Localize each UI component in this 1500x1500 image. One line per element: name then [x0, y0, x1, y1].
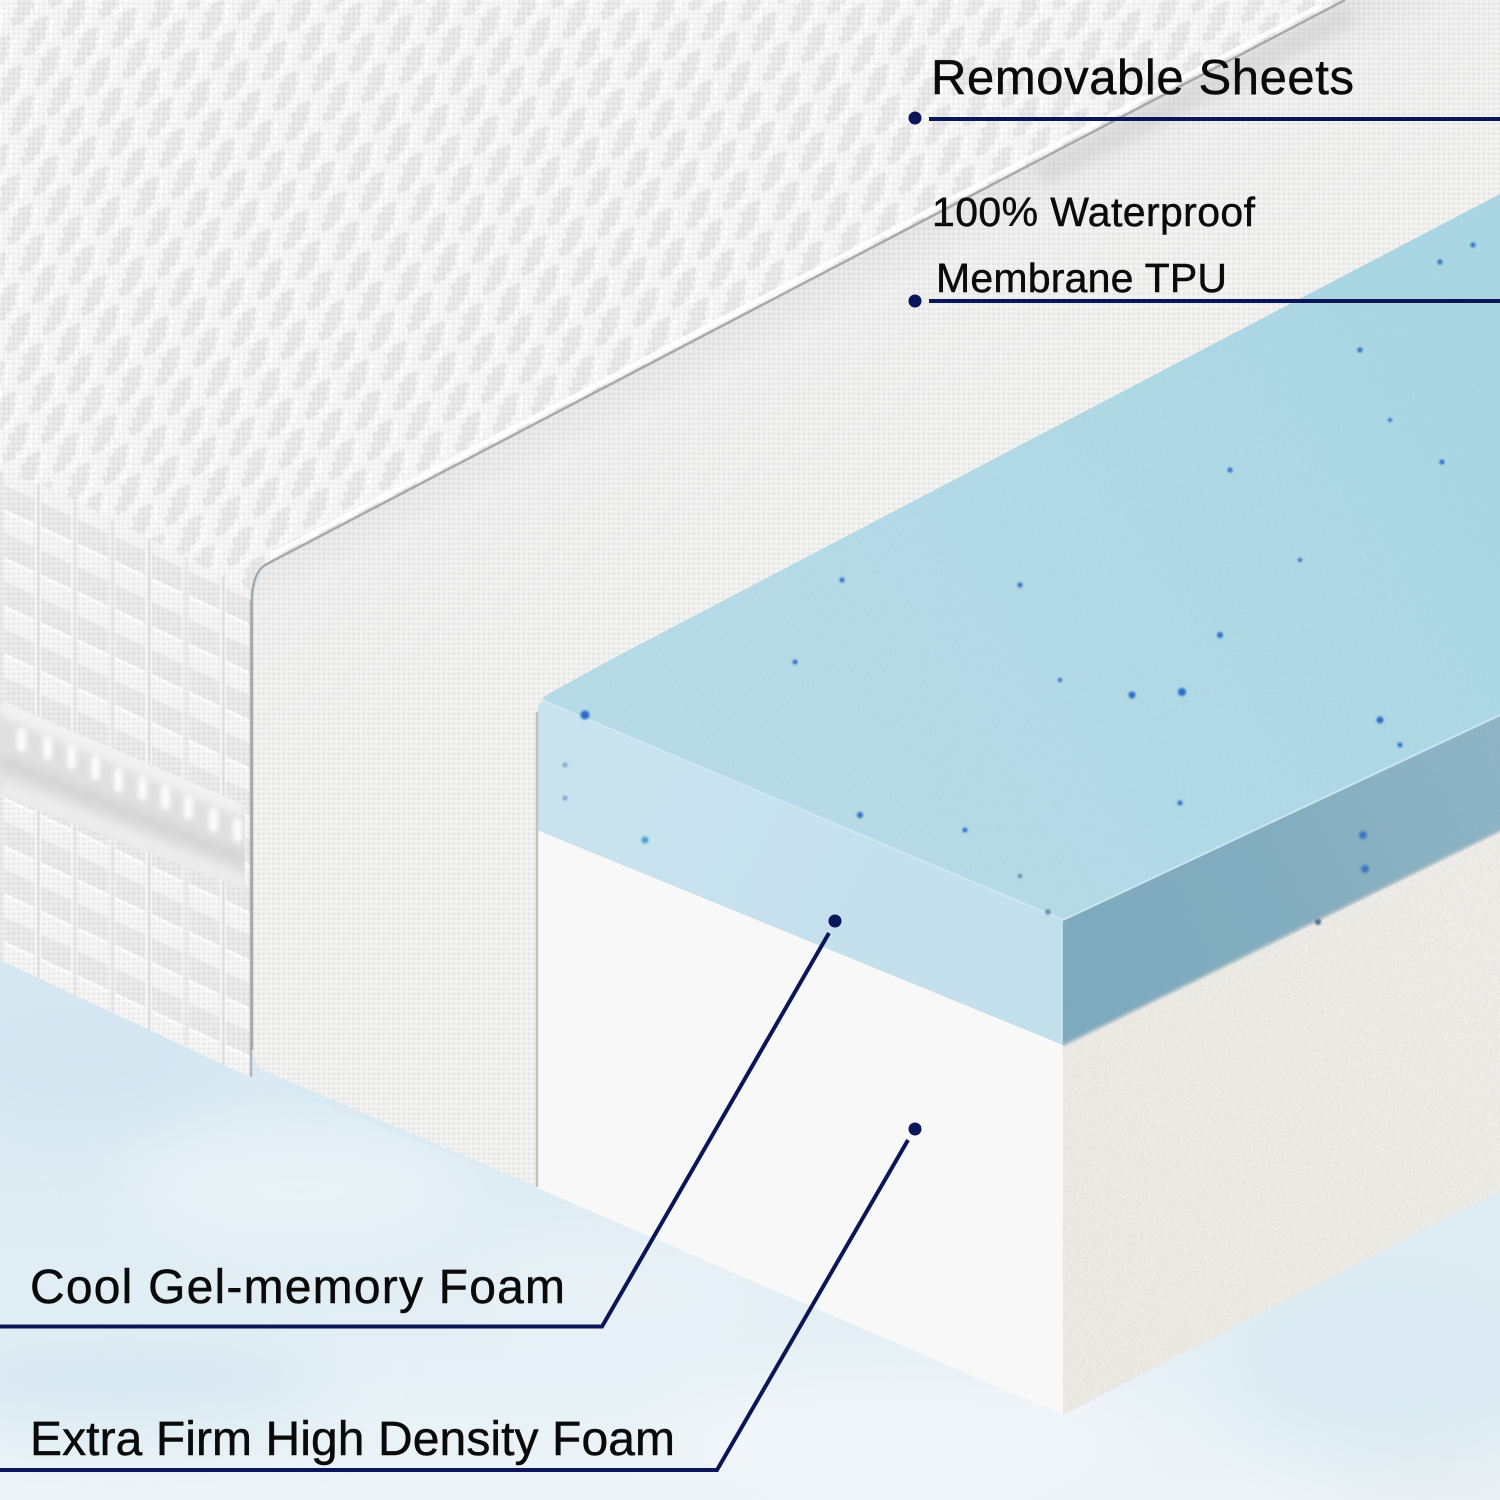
- panel edge beside foam: [536, 712, 538, 1187]
- callout: Extra Firm High Density Foam: Extra Firm High Density Foam: [30, 1413, 675, 1466]
- gel front: [537, 702, 1063, 1045]
- callout: Removable Sheets: Removable Sheets: [931, 51, 1354, 105]
- foam side: [1063, 830, 1500, 1415]
- quilted top cover: [0, 0, 1345, 700]
- callout: 100% Waterproof Membrane TPU: 100% Waterproof: [932, 189, 1256, 235]
- callout: 100% Waterproof Membrane TPU: Membrane TPU: [936, 255, 1227, 301]
- gel side: [1063, 715, 1500, 1045]
- white foam layer: [537, 830, 1500, 1415]
- zipper: [0, 700, 245, 890]
- callout: Cool Gel-memory Foam: [0, 914, 842, 1326]
- speckles: [562, 242, 1476, 925]
- callout: Cool Gel-memory Foam: Cool Gel-memory Foam: [30, 1261, 565, 1314]
- gel top: [543, 194, 1500, 920]
- callout: Removable Sheets: [908, 51, 1500, 124]
- seam: [252, 0, 1345, 1050]
- quilted side of cover with zipper: [0, 470, 251, 1077]
- callout: Extra Firm High Density Foam: [0, 1122, 922, 1470]
- waterproof membrane panel: [252, 0, 1500, 1187]
- callout: 100% Waterproof Membrane TPU: [908, 189, 1500, 308]
- gel-memory foam layer: [537, 194, 1500, 1045]
